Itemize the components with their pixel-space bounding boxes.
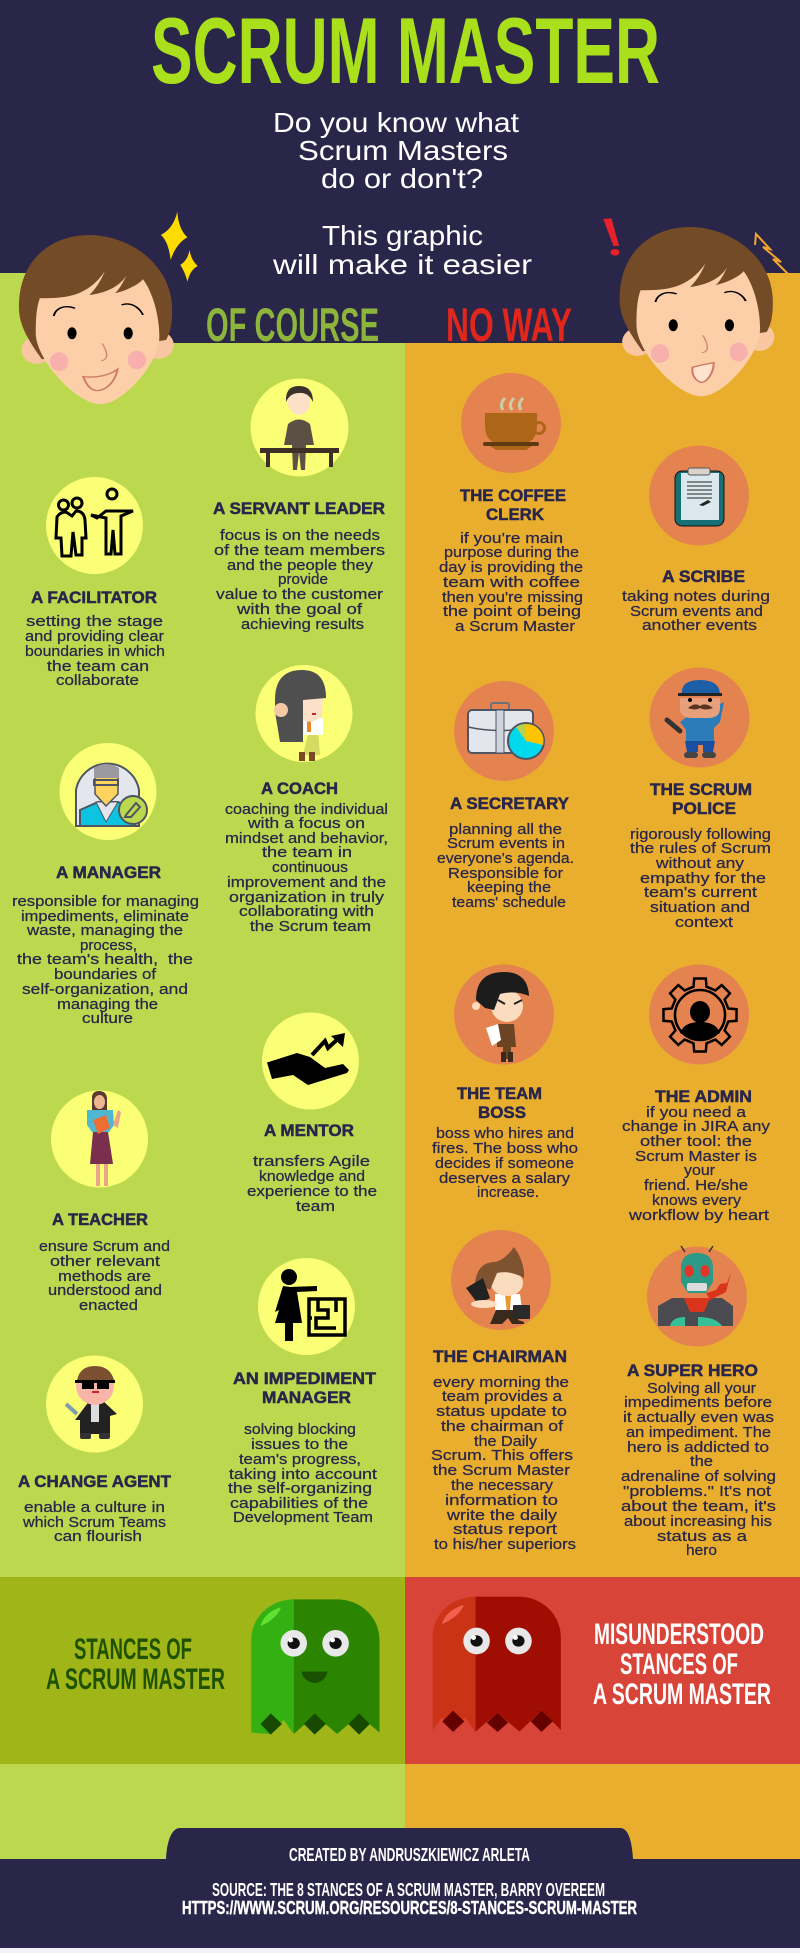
icon: hand with growth arrow [262, 1012, 359, 1110]
intro text: Do you know what [273, 107, 519, 138]
description: waste, managing the [26, 922, 183, 939]
description: information to [445, 1492, 558, 1509]
description: which Scrum Teams [22, 1514, 166, 1531]
description: another events [642, 617, 757, 634]
heading: a coach: A COACH [261, 780, 338, 798]
description: taking into account [229, 1466, 378, 1483]
description: "problems." It's not [623, 1483, 772, 1500]
panel: a manager [12, 743, 199, 1027]
heading: a manager: A MANAGER [56, 864, 161, 882]
footer [0, 1828, 800, 1953]
description: culture [82, 1010, 133, 1027]
heading: the coffee clerk: CLERK [486, 506, 544, 524]
description [247, 1153, 377, 1215]
description: the [690, 1453, 713, 1470]
panel: the admin [622, 964, 771, 1224]
panel: the team boss [432, 964, 578, 1201]
heading: the team boss [457, 1085, 542, 1122]
description: the team in [262, 844, 352, 861]
description: Solving all your [647, 1380, 756, 1397]
description: Responsible for [448, 865, 563, 882]
credit line: CREATED BY ANDRUSZKIEWICZ ARLETA [289, 1845, 530, 1865]
description: Scrum. This offers [431, 1447, 573, 1464]
panel: a servant leader [213, 378, 385, 633]
panel: a mentor [247, 1012, 377, 1215]
description: the Scrum team [250, 918, 371, 935]
description: capabilities of the [230, 1495, 368, 1512]
description: continuous [272, 859, 348, 876]
description [228, 1421, 378, 1526]
description: boundaries of [54, 966, 157, 983]
description: and the people they [227, 557, 374, 574]
icon: chairman with phone [451, 1230, 551, 1330]
description [622, 588, 770, 634]
heading: an impediment manager [233, 1370, 376, 1407]
description: solving blocking [244, 1421, 356, 1438]
description: issues to the [251, 1436, 348, 1453]
icon: green ghost [251, 1599, 380, 1735]
description: to his/her superiors [434, 1536, 576, 1553]
icon: angry boss [454, 964, 554, 1064]
description: the point of being [443, 603, 581, 620]
heading: a mentor: A MENTOR [264, 1122, 354, 1140]
description: coaching the individual [225, 801, 388, 818]
description: status report [453, 1521, 558, 1538]
heading: the admin: THE ADMIN [655, 1088, 752, 1106]
description: a Scrum Master [455, 618, 575, 635]
description: provide [278, 571, 328, 588]
description: Scrum events and [630, 603, 763, 620]
heading: of course: OF COURSE [206, 298, 379, 351]
intro text: will make it easier [272, 249, 532, 280]
description: hero is addicted to [627, 1439, 769, 1456]
description: planning all the [449, 821, 562, 838]
description [622, 1104, 771, 1224]
description: collaborating with [239, 903, 374, 920]
description: decides if someone [435, 1155, 574, 1172]
description: empathy for the [640, 870, 766, 887]
description: without any [655, 855, 745, 872]
description: the rules of Scrum [630, 840, 771, 857]
description: can flourish [54, 1528, 142, 1545]
icon: coffee cup [461, 373, 561, 473]
icon: smiling head [19, 235, 174, 404]
panel: a super hero [621, 1246, 776, 1559]
panel: the scrum police [630, 668, 771, 931]
description: status update to [436, 1403, 567, 1420]
description: focus is on the needs [220, 527, 380, 544]
description [630, 826, 771, 931]
heading: a scribe: A SCRIBE [662, 568, 745, 586]
description: Scrum events in [447, 835, 565, 852]
heading: no way: NO WAY [446, 298, 572, 351]
heading: stances of a scrum master [46, 1633, 225, 1696]
icon: briefcase and pie chart [454, 681, 554, 781]
description: change in JIRA any [622, 1118, 771, 1135]
panel: a facilitator [25, 477, 165, 689]
description: every morning the [433, 1374, 569, 1391]
description: collaborate [56, 672, 139, 689]
icon: man on bench [250, 378, 348, 476]
heading: the team boss: BOSS [478, 1104, 526, 1122]
heading: a servant leader: A SERVANT LEADER [213, 500, 385, 518]
panel: a scribe [622, 446, 770, 634]
icon: girl with long hair [256, 665, 352, 762]
icon: masked hero [647, 1246, 747, 1346]
heading: the scrum police: POLICE [672, 800, 736, 818]
intro text: do or don't? [321, 163, 483, 194]
heading: a secretary: A SECRETARY [450, 795, 569, 813]
description: your [684, 1162, 715, 1179]
description: team with coffee [443, 574, 580, 591]
description: hero [686, 1542, 717, 1559]
intro text [272, 107, 532, 280]
panel: a teacher [39, 1090, 170, 1314]
heading: a facilitator: A FACILITATOR [31, 589, 157, 607]
heading: the team boss: THE TEAM [457, 1085, 542, 1103]
description: managing the [57, 996, 158, 1013]
description [432, 1125, 578, 1201]
description: about increasing his [624, 1513, 772, 1530]
description [12, 893, 199, 1027]
heading: a change agent: A CHANGE AGENT [18, 1473, 171, 1491]
description: context [675, 914, 734, 931]
description: it actually even was [623, 1409, 774, 1426]
description: the chairman of [441, 1418, 564, 1435]
description: taking notes during [622, 588, 770, 605]
heading: the scrum police: THE SCRUM [650, 781, 752, 799]
heading: a teacher: A TEACHER [52, 1211, 148, 1229]
heading: an impediment manager: AN IMPEDIMENT [233, 1370, 376, 1388]
heading: the coffee clerk [460, 487, 566, 524]
intro text: Scrum Masters [298, 135, 508, 166]
description: ensure Scrum and [39, 1238, 170, 1255]
panel: the chairman [431, 1230, 576, 1553]
description [22, 1499, 166, 1545]
icon: sparkles [161, 212, 198, 282]
description: write the daily [446, 1507, 558, 1524]
description: team's current [644, 884, 758, 901]
description [439, 530, 583, 635]
description: team's progress, [239, 1451, 361, 1468]
heading: stances of a scrum master: STANCES OF [74, 1633, 192, 1666]
description: workflow by heart [628, 1207, 770, 1224]
description: team provides a [442, 1388, 563, 1405]
description: situation and [650, 899, 750, 916]
icon: woman with book [51, 1090, 148, 1188]
description: impediments before [624, 1394, 772, 1411]
panel: an impediment manager [228, 1258, 378, 1526]
description: and providing clear [25, 628, 164, 645]
description [214, 527, 385, 633]
icon: person and maze [258, 1258, 355, 1355]
description: increase. [477, 1184, 539, 1201]
description: friend. He/she [644, 1177, 748, 1194]
description: the necessary [451, 1477, 554, 1494]
description: other tool: the [640, 1133, 752, 1150]
panel: a coach [225, 665, 388, 935]
source url: HTTPS://WWW.SCRUM.ORG/RESOURCES/8-STANCES-SCRUM-MASTER [182, 1898, 637, 1918]
icon: exclamation mark [603, 218, 620, 256]
icon: zigzag [755, 234, 790, 276]
description [25, 613, 165, 689]
description [39, 1238, 170, 1314]
heading: a super hero: A SUPER HERO [627, 1362, 758, 1380]
description: knows every [652, 1192, 742, 1209]
description: mindset and behavior, [225, 830, 388, 847]
heading: an impediment manager: MANAGER [262, 1389, 351, 1407]
description: Scrum Master is [635, 1148, 757, 1165]
icon: police officer [650, 668, 750, 768]
description: transfers Agile [253, 1153, 370, 1170]
description: the self-organizing [228, 1480, 372, 1497]
description: boss who hires and [436, 1125, 574, 1142]
description: with a focus on [247, 815, 365, 832]
panel: the coffee clerk [439, 373, 583, 635]
description: process, [80, 937, 137, 954]
heading: the chairman: THE CHAIRMAN [433, 1348, 567, 1366]
description: improvement and the [227, 874, 386, 891]
heading: stances of a scrum master: A SCRUM MASTER [46, 1663, 225, 1696]
icon: agent in sunglasses [46, 1356, 143, 1452]
description: knowledge and [259, 1168, 365, 1185]
heading: misunderstood stances of a scrum master [593, 1618, 771, 1711]
description [437, 821, 574, 911]
description: the Daily [474, 1433, 538, 1450]
description: self-organization, and [22, 981, 188, 998]
description: teams' schedule [452, 894, 566, 911]
panel: stances banner [0, 1577, 800, 1764]
intro text: This graphic [322, 220, 483, 251]
description: status as a [657, 1528, 748, 1545]
heading: the scrum police [650, 781, 752, 818]
description: responsible for managing [12, 893, 199, 910]
description: understood and [48, 1282, 162, 1299]
description: value to the customer [216, 586, 383, 603]
description: purpose during the [444, 544, 579, 561]
description: day is providing the [439, 559, 583, 576]
description: team [296, 1198, 335, 1215]
description: setting the stage [26, 613, 163, 630]
description: if you need a [646, 1104, 747, 1121]
description: deserves a salary [439, 1170, 571, 1187]
description [431, 1374, 576, 1553]
description [225, 801, 388, 935]
description: experience to the [247, 1183, 377, 1200]
icon: gear with person [649, 964, 749, 1064]
icon: manager portrait [60, 743, 156, 840]
description: Development Team [233, 1509, 373, 1526]
description: adrenaline of solving [621, 1468, 776, 1485]
description: if you're main [460, 530, 563, 547]
description: methods are [58, 1268, 151, 1285]
description: then you're missing [442, 589, 583, 606]
icon: people pointing [46, 477, 143, 574]
description: boundaries in which [25, 643, 165, 660]
description: the team's health, the [17, 951, 193, 968]
description [621, 1380, 776, 1559]
description: rigorously following [630, 826, 771, 843]
description: an impediment. The [626, 1424, 771, 1441]
description: achieving results [241, 616, 364, 633]
description: everyone's agenda. [437, 850, 574, 867]
description: about the team, it's [621, 1498, 776, 1515]
description: of the team members [214, 542, 385, 559]
icon: surprised head [620, 227, 774, 396]
icon: clipboard [649, 446, 749, 546]
description: organization in truly [229, 889, 385, 906]
description: the team can [47, 658, 149, 675]
heading: the coffee clerk: THE COFFEE [460, 487, 566, 505]
description: other relevant [50, 1253, 161, 1270]
source line: SOURCE: THE 8 STANCES OF A SCRUM MASTER, BARRY OVEREEM [212, 1880, 605, 1900]
description: fires. The boss who [432, 1140, 578, 1157]
description: impediments, eliminate [21, 908, 189, 925]
description: enable a culture in [24, 1499, 165, 1516]
panel: a change agent [18, 1356, 171, 1545]
description: enacted [79, 1297, 138, 1314]
description: keeping the [467, 879, 551, 896]
icon: red ghost [433, 1597, 561, 1732]
panel: a secretary [437, 681, 574, 911]
description: with the goal of [236, 601, 363, 618]
description: the Scrum Master [433, 1462, 570, 1479]
